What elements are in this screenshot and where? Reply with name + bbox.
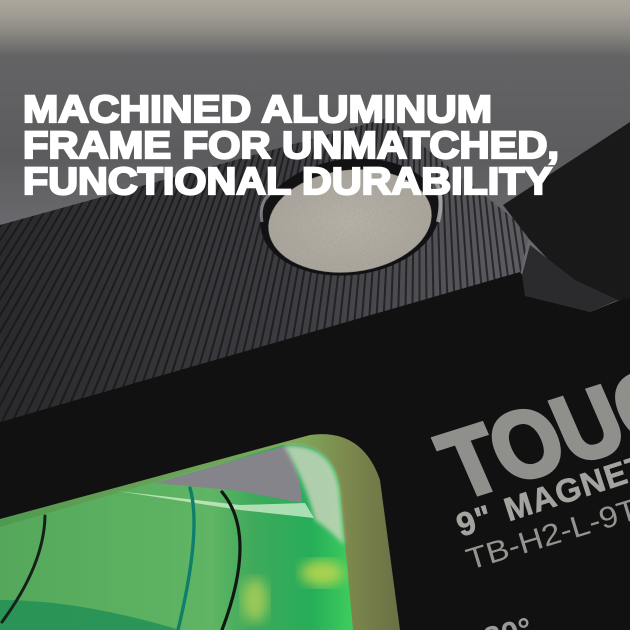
vial shadow band bbox=[0, 600, 180, 630]
bubble vial bbox=[0, 434, 400, 630]
magnetic button bbox=[254, 148, 446, 286]
yellow glow bbox=[300, 560, 344, 586]
printed branding on level bbox=[425, 328, 630, 630]
marking lines bbox=[2, 488, 240, 630]
level body: top face with machined stripes bbox=[0, 119, 528, 422]
glass highlight bbox=[284, 446, 344, 545]
white reflection bbox=[117, 491, 314, 518]
title: MACHINED ALUMINUM bbox=[23, 89, 492, 131]
model number: TB-H2-L-9T bbox=[462, 493, 630, 577]
vial inner window bbox=[0, 445, 353, 630]
title: FUNCTIONAL DURABILITY bbox=[23, 161, 552, 203]
title bbox=[23, 89, 559, 203]
title: FRAME FOR UNMATCHED, bbox=[23, 125, 559, 167]
level front face bbox=[0, 272, 630, 630]
dark right block bbox=[503, 122, 630, 312]
textured block underside bbox=[522, 245, 618, 312]
vial rim bbox=[0, 434, 400, 630]
air bubble bbox=[155, 446, 302, 503]
